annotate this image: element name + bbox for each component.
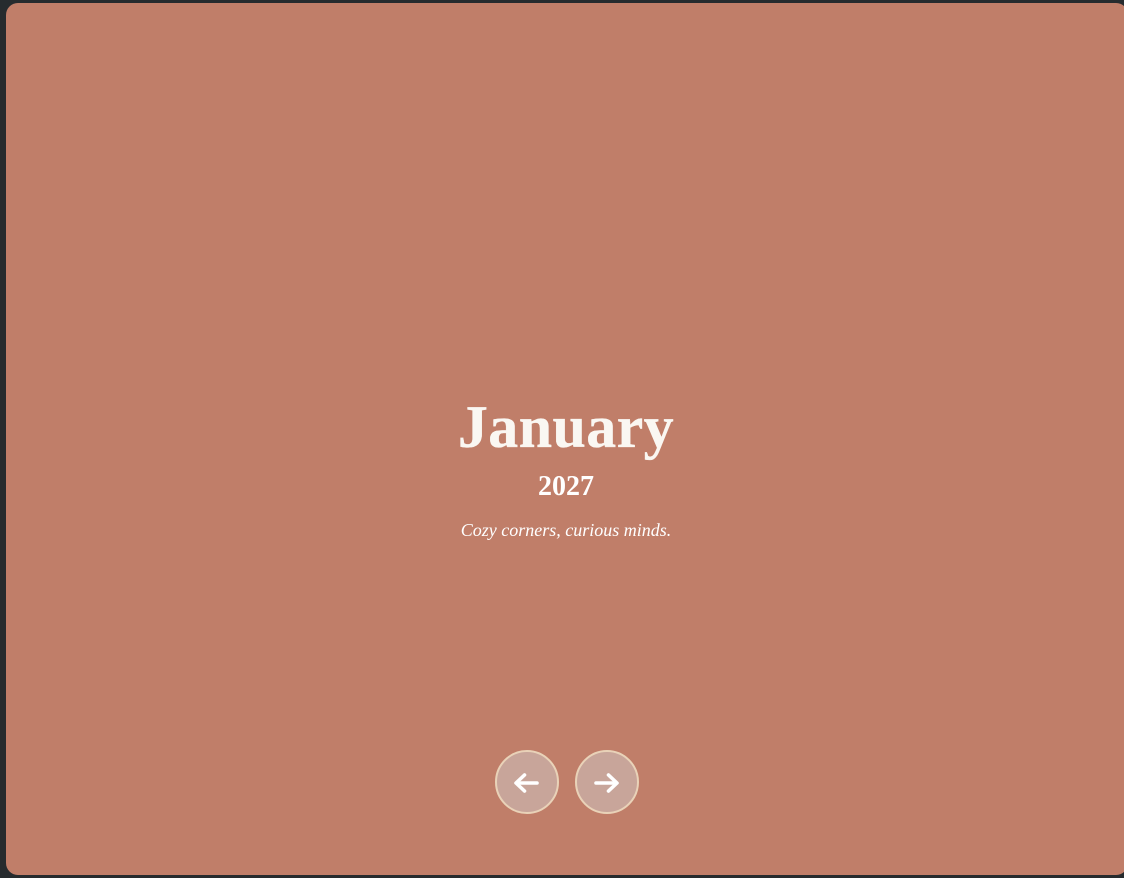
button: previous xyxy=(495,750,559,814)
year: 2027 xyxy=(538,471,594,502)
tagline: Cozy corners, curious minds. xyxy=(461,520,671,540)
button: next xyxy=(575,750,639,814)
title: January: January xyxy=(458,394,674,460)
